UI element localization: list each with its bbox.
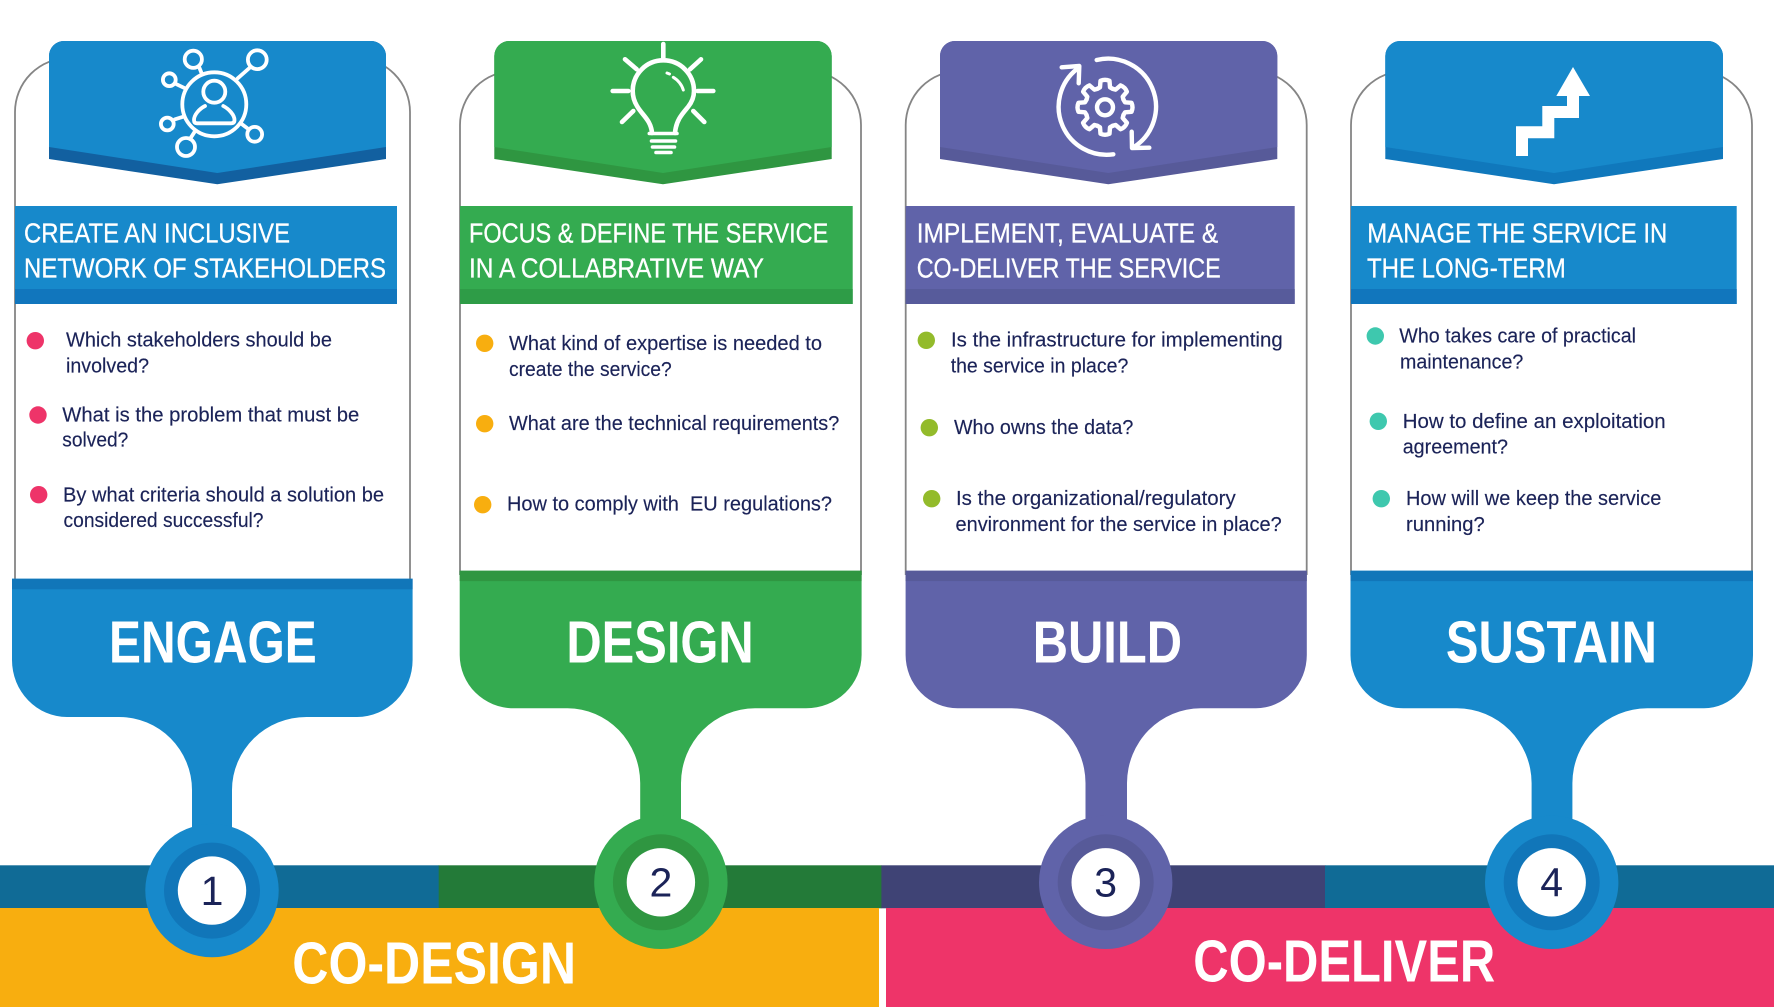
question list: considered successful? <box>64 509 264 532</box>
question list: the service in place? <box>951 355 1128 378</box>
header tab <box>494 41 832 184</box>
question list: Which stakeholders should be <box>66 329 332 352</box>
question list: Who takes care of practical <box>1399 325 1636 348</box>
co-design label: CO-DESIGN <box>292 930 576 996</box>
co-design bar <box>0 908 879 1007</box>
title bar <box>15 206 397 304</box>
title bar: THE LONG-TERM <box>1367 252 1566 283</box>
question list: environment for the service in place? <box>956 513 1282 536</box>
question list <box>474 332 839 516</box>
question list: What kind of expertise is needed to <box>509 332 822 355</box>
question list: involved? <box>66 355 149 378</box>
question list: agreement? <box>1403 436 1508 458</box>
title bar <box>1351 206 1737 304</box>
number badge 1: 1 <box>201 868 223 914</box>
panel: design <box>460 41 862 949</box>
question list: What is the problem that must be <box>62 404 359 427</box>
number badge 3: 3 <box>1094 860 1117 906</box>
timeline band <box>0 865 1774 908</box>
question list: How to comply with EU regulations? <box>507 493 832 516</box>
icon: stairs with up arrow <box>1516 67 1590 156</box>
design base and stem: DESIGN <box>566 610 754 676</box>
question list: By what criteria should a solution be <box>63 484 384 507</box>
build base and stem <box>906 571 1307 830</box>
question list: How to define an exploitation <box>1403 410 1666 433</box>
title bar: NETWORK OF STAKEHOLDERS <box>24 252 386 283</box>
number badge 3 <box>1039 816 1172 949</box>
sustain base and stem: SUSTAIN <box>1446 610 1657 676</box>
number badge 1 <box>145 824 279 957</box>
icon: stakeholder network <box>161 50 267 156</box>
icon: gear with cycle arrows <box>1059 59 1156 155</box>
title bar <box>906 206 1295 304</box>
question list <box>1367 325 1666 536</box>
build base and stem: BUILD <box>1033 610 1182 676</box>
card outline <box>460 71 861 575</box>
header tab <box>49 41 386 184</box>
title bar: FOCUS & DEFINE THE SERVICE <box>469 218 828 249</box>
question list <box>27 329 384 532</box>
title bar: IMPLEMENT, EVALUATE & <box>917 218 1218 249</box>
question list: What are the technical requirements? <box>509 412 839 435</box>
question list: maintenance? <box>1400 350 1523 373</box>
gear teeth <box>1078 80 1132 135</box>
title bar <box>460 206 853 304</box>
panel: build <box>906 41 1307 949</box>
panel: sustain <box>1350 41 1753 949</box>
question list: How will we keep the service <box>1406 487 1661 510</box>
question list: create the service? <box>509 358 672 381</box>
co-deliver label: CO-DELIVER <box>1193 929 1495 995</box>
number badge 2: 2 <box>649 860 672 906</box>
question list: Is the infrastructure for implementing <box>951 329 1283 352</box>
question list: Who owns the data? <box>954 416 1133 439</box>
co-deliver bar <box>886 908 1774 1007</box>
title bar: IN A COLLABRATIVE WAY <box>469 252 764 283</box>
design base and stem <box>460 571 862 830</box>
number badge 4 <box>1485 816 1618 949</box>
title bar: CO-DELIVER THE SERVICE <box>917 252 1221 283</box>
card outline <box>906 71 1307 575</box>
engage base and stem: ENGAGE <box>109 610 317 676</box>
icon: light bulb <box>613 44 713 152</box>
question list: running? <box>1406 513 1485 536</box>
number badge 4: 4 <box>1540 860 1563 906</box>
sustain base and stem <box>1350 571 1753 830</box>
header tab <box>1385 41 1723 184</box>
question list <box>918 329 1283 536</box>
engage base and stem <box>12 579 413 840</box>
question list: Is the organizational/regulatory <box>956 487 1236 510</box>
header tab <box>940 41 1277 184</box>
panel: engage <box>12 41 413 957</box>
number badge 2 <box>594 816 728 949</box>
title bar: MANAGE THE SERVICE IN <box>1367 218 1667 249</box>
card outline <box>1351 71 1752 575</box>
title bar: CREATE AN INCLUSIVE <box>24 218 290 249</box>
question list: solved? <box>62 429 128 452</box>
card outline <box>15 58 410 585</box>
